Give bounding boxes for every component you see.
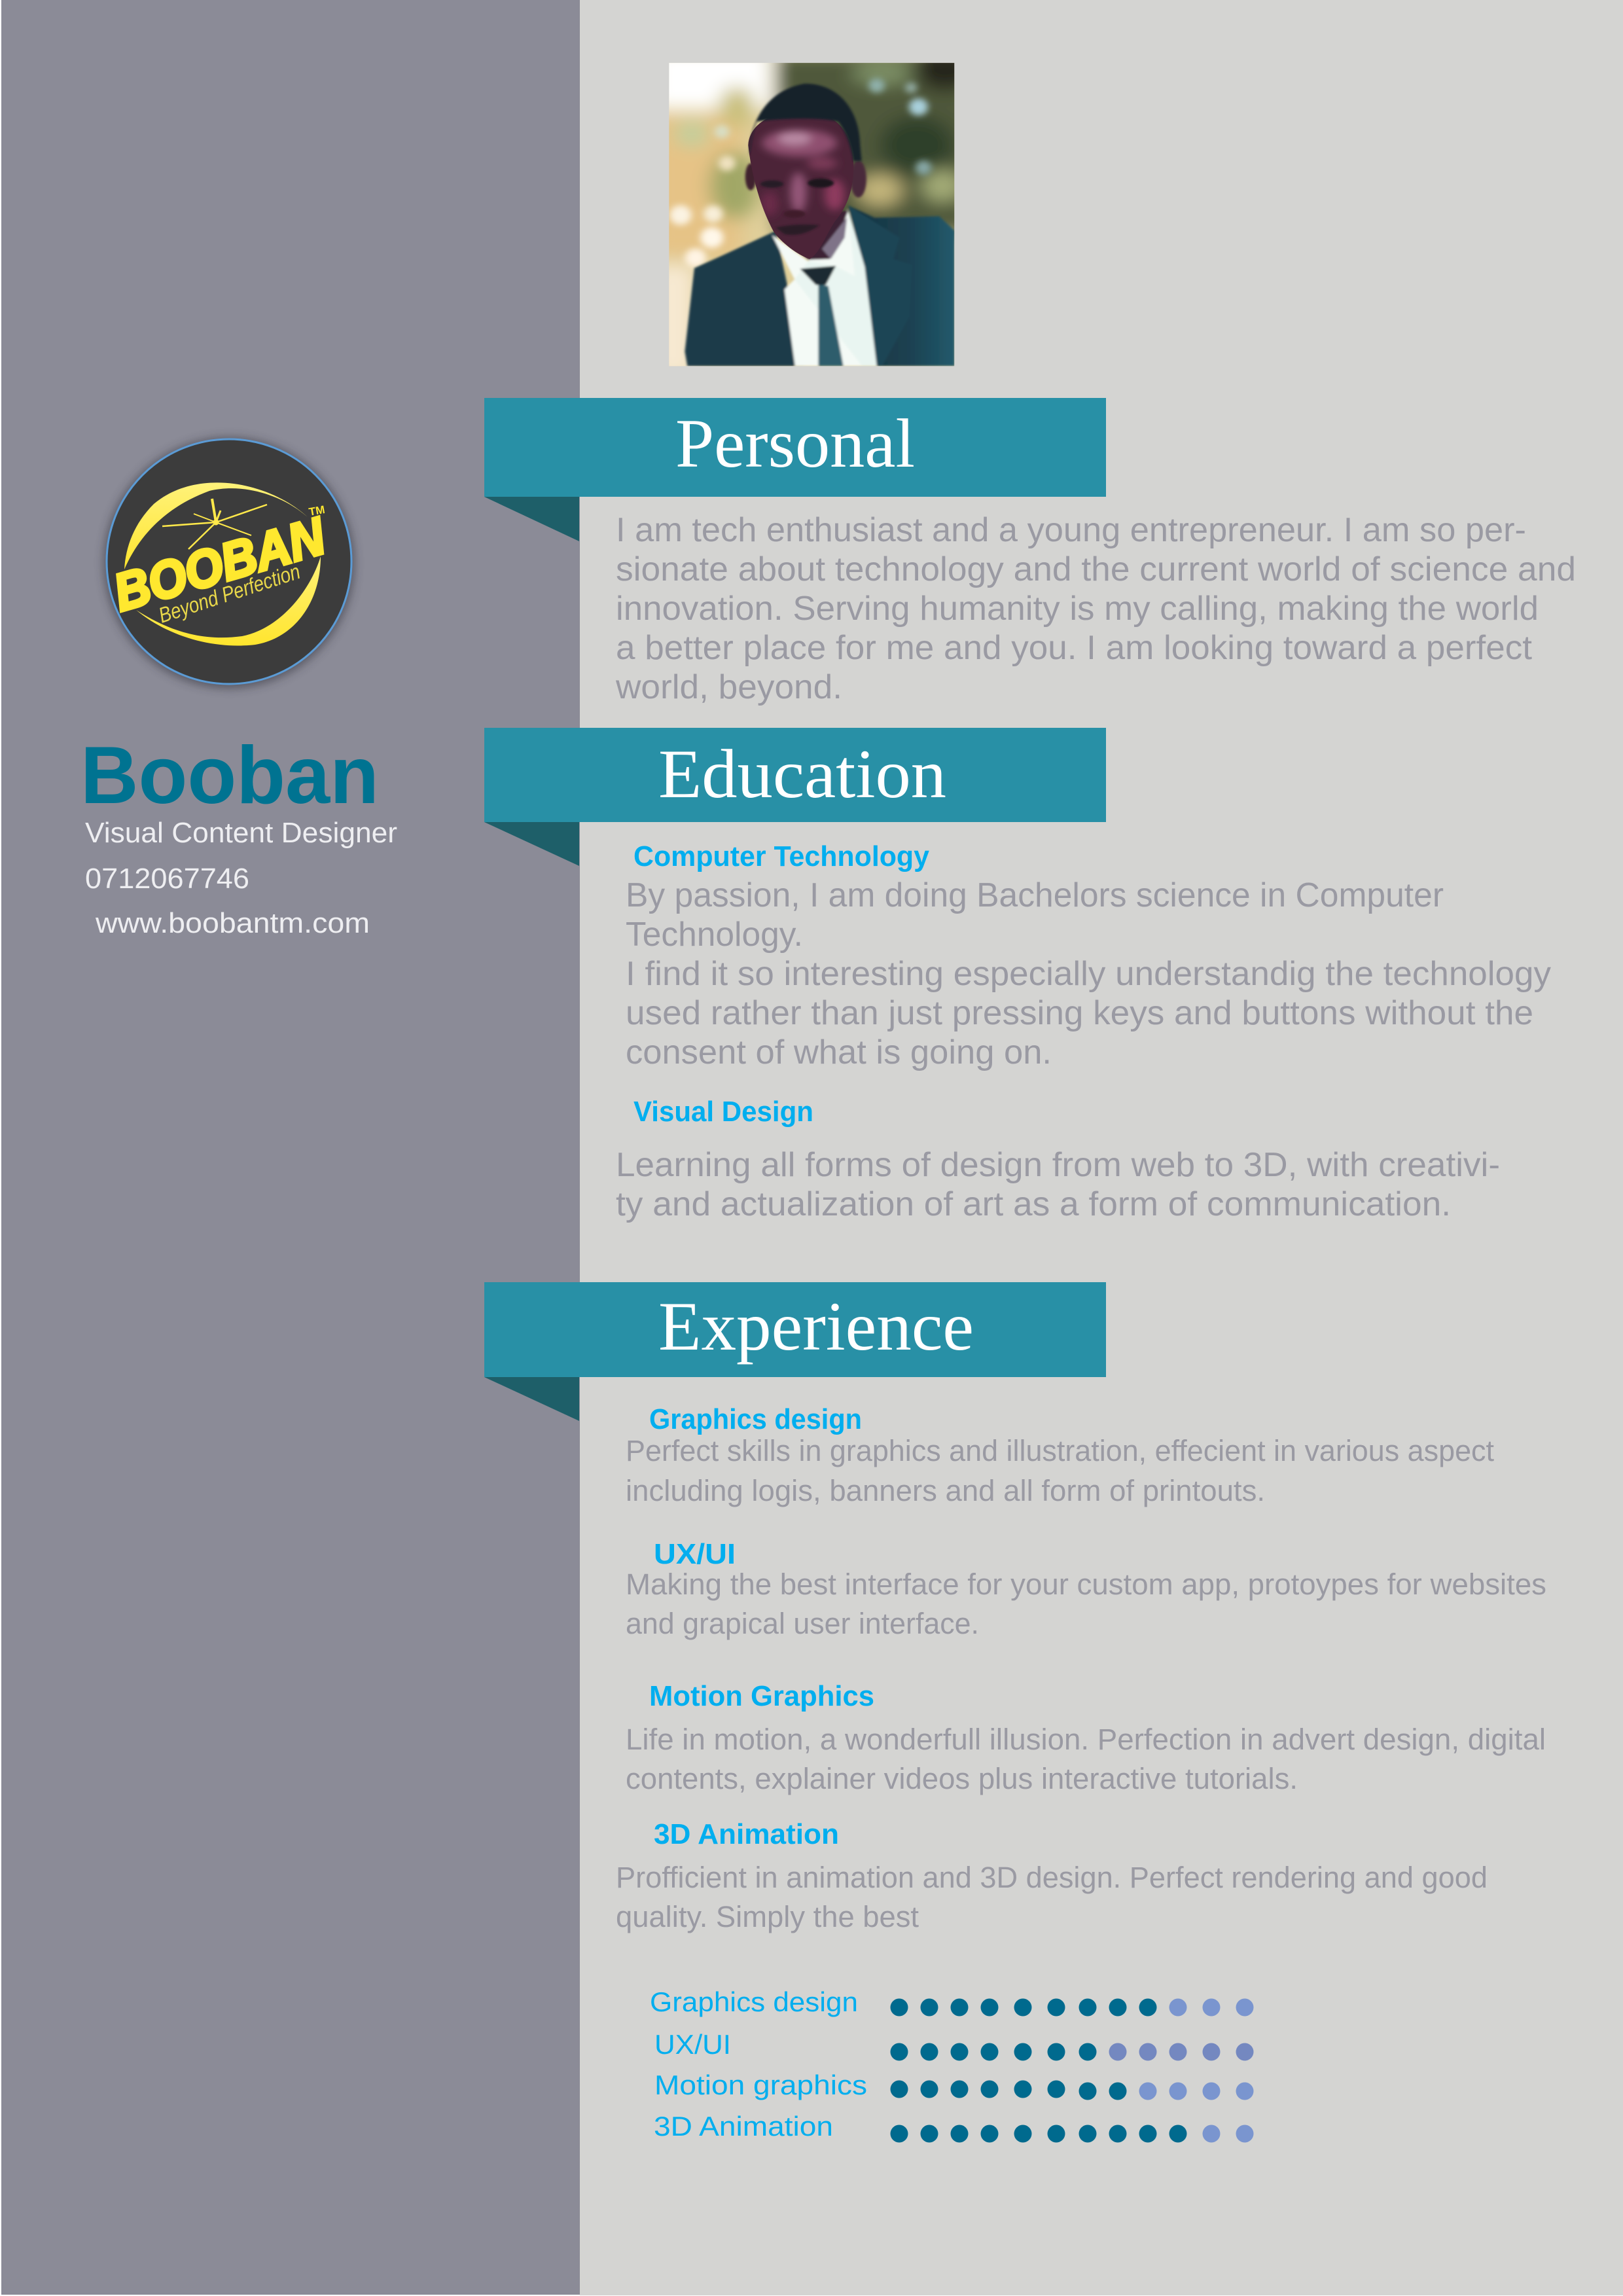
computer technology text: By passion, I am doing Bachelors science in Computer bbox=[626, 876, 1444, 914]
heading ribbon: education: Education bbox=[658, 736, 946, 812]
visual design text: ty and actualization of art as a form of communication. bbox=[616, 1185, 1451, 1223]
subheading: graphics design: Graphics design bbox=[649, 1403, 862, 1435]
right content panel bbox=[580, 0, 1623, 2295]
heading ribbon: experience: Experience bbox=[658, 1288, 974, 1365]
subheading: motion graphics: Motion Graphics bbox=[649, 1680, 874, 1712]
subheading: ux/ui: UX/UI bbox=[654, 1538, 736, 1570]
ux/ui text: Making the best interface for your custom app, protoypes for websites bbox=[626, 1568, 1546, 1601]
logo trademark: TM bbox=[308, 503, 326, 518]
3d animation text: Profficient in animation and 3D design. Perfect rendering and good bbox=[616, 1861, 1488, 1894]
computer technology text: I find it so interesting especially understandig the technology bbox=[626, 955, 1551, 993]
skill rating chart bbox=[650, 1986, 1254, 2143]
logo disc bbox=[107, 439, 351, 684]
personal text: world, beyond. bbox=[615, 668, 842, 706]
heading ribbon: experience bbox=[484, 1282, 1106, 1421]
skill row: ux/ui bbox=[654, 2029, 1254, 2060]
3d animation text: quality. Simply the best bbox=[616, 1900, 919, 1933]
left sidebar panel bbox=[1, 0, 580, 2295]
ux/ui text: and grapical user interface. bbox=[626, 1607, 979, 1640]
skill row: 3d animation bbox=[654, 2111, 1254, 2143]
personal text: I am tech enthusiast and a young entrepreneur. I am so per- bbox=[616, 511, 1526, 549]
job title: Visual Content Designer bbox=[85, 817, 397, 849]
panel: personal bbox=[484, 398, 1576, 706]
panel: experience bbox=[484, 1282, 1546, 1933]
motion graphics text: Life in motion, a wonderfull illusion. Perfection in advert design, digital bbox=[626, 1723, 1546, 1756]
computer technology text: Technology. bbox=[626, 916, 803, 954]
graphics design text: Perfect skills in graphics and illustration, effecient in various aspect bbox=[626, 1434, 1494, 1467]
website: www.boobantm.com bbox=[95, 907, 370, 939]
skill row: ux/ui: UX/UI bbox=[654, 2029, 731, 2060]
phone: 0712067746 bbox=[85, 863, 249, 895]
hair bbox=[749, 84, 862, 161]
visual design text: Learning all forms of design from web to 3D, with creativi- bbox=[616, 1146, 1500, 1184]
neck bbox=[775, 211, 848, 260]
personal text: a better place for me and you. I am looking toward a perfect bbox=[616, 629, 1533, 667]
ears bbox=[850, 160, 866, 198]
logo badge bbox=[103, 437, 355, 689]
ux/ui text bbox=[626, 1568, 1546, 1640]
skill row: motion graphics bbox=[654, 2070, 1254, 2100]
name: Booban bbox=[80, 730, 379, 821]
logo swoosh bottom bbox=[136, 556, 321, 646]
subheading: 3d animation: 3D Animation bbox=[654, 1818, 839, 1850]
logo shadow bbox=[103, 437, 355, 689]
graphics design text bbox=[626, 1434, 1494, 1507]
name and contact block bbox=[80, 730, 397, 939]
skill row: graphics design: Graphics design bbox=[650, 1986, 858, 2017]
skill row: 3d animation: 3D Animation bbox=[654, 2111, 833, 2142]
logo star bbox=[162, 499, 267, 549]
logo swoosh top bbox=[124, 482, 308, 569]
portrait photo bbox=[669, 63, 954, 367]
visual design text bbox=[616, 1146, 1500, 1223]
motion graphics text bbox=[626, 1723, 1546, 1795]
heading ribbon: personal bbox=[484, 398, 1106, 541]
face bbox=[748, 111, 853, 259]
subheading: visual design: Visual Design bbox=[633, 1096, 813, 1128]
skill row: graphics design bbox=[650, 1986, 1254, 2017]
subheading: computer technology: Computer Technology bbox=[633, 840, 930, 872]
3d animation text bbox=[616, 1861, 1488, 1933]
computer technology text: consent of what is going on. bbox=[626, 1033, 1052, 1071]
personal text: innovation. Serving humanity is my calling, making the world bbox=[616, 590, 1539, 628]
motion graphics text: contents, explainer videos plus interactive tutorials. bbox=[626, 1762, 1298, 1795]
computer technology text bbox=[626, 876, 1551, 1071]
computer technology text: used rather than just pressing keys and buttons without the bbox=[626, 994, 1533, 1032]
shirt bbox=[770, 208, 863, 367]
tie bbox=[818, 284, 844, 366]
panel: education bbox=[484, 728, 1551, 1223]
graphics design text: including logis, banners and all form of printouts. bbox=[626, 1474, 1265, 1507]
heading ribbon: education bbox=[484, 728, 1106, 866]
logo tagline: Beyond Perfection bbox=[156, 559, 303, 628]
personal text bbox=[615, 511, 1576, 706]
jacket bbox=[685, 231, 804, 366]
logo wordmark: BOOBAN bbox=[107, 506, 332, 622]
personal text: sionate about technology and the current world of science and bbox=[616, 550, 1576, 588]
skill row: motion graphics: Motion graphics bbox=[654, 2070, 867, 2100]
heading ribbon: personal: Personal bbox=[675, 405, 915, 482]
